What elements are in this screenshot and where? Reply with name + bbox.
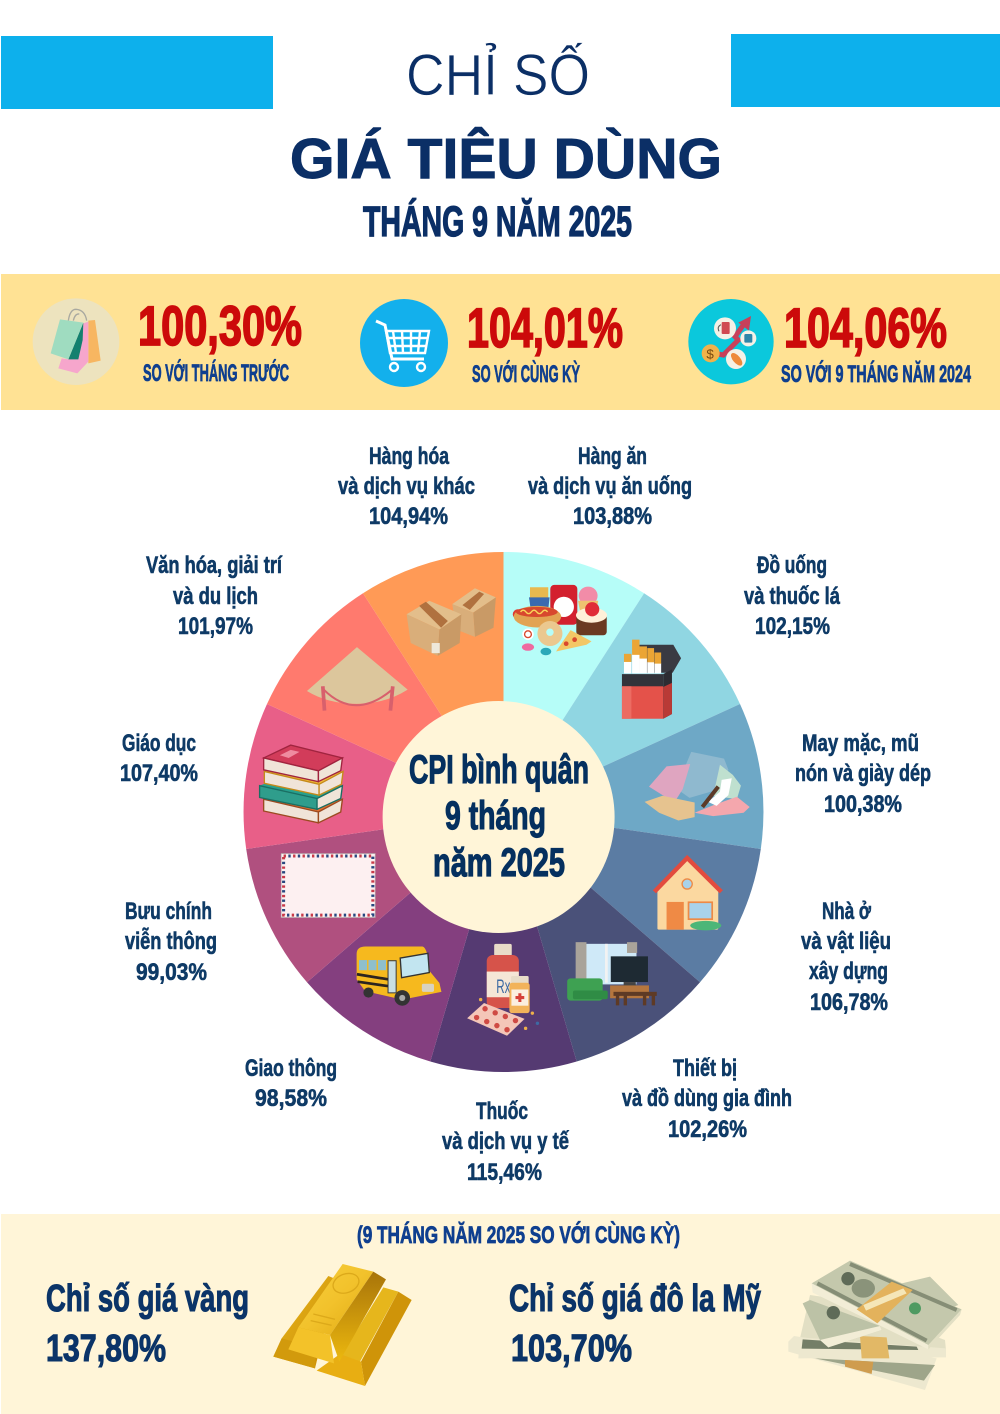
label: medicine and health: và dịch vụ y tế [442,1128,569,1155]
caption: month on month: SO VỚI THÁNG TRƯỚC [143,359,289,387]
label: garments: 100,38% [824,791,902,818]
icon: medicine [467,944,539,1036]
label: medicine and health [442,1098,569,1186]
header accent bar left [1,36,273,109]
icon: books [260,745,343,823]
value: month on month: 100,30% [138,294,302,357]
centre circle: năm 2025 [433,841,565,885]
icon: price basket [688,299,774,384]
label: post and telecom: Bưu chính [125,898,212,925]
label: education: 107,40% [120,760,198,787]
text: gold price index: Chỉ số giá vàng [46,1278,249,1320]
label: education: Giáo dục [122,730,196,757]
icon: shopping bags [33,298,119,385]
text: dollar price index: Chỉ số giá đô la Mỹ [509,1278,761,1320]
label: housing: xây dựng [809,958,888,985]
label: medicine and health: Thuốc [476,1098,528,1125]
label: post and telecom: 99,03% [136,959,207,986]
label: beverages and tobacco: và thuốc lá [744,583,840,610]
text: dollar price index: 103,70% [511,1328,632,1370]
label: garments [795,730,931,818]
label: post and telecom [125,898,217,986]
value: nine months: 104,06% [784,296,947,359]
icon: food [513,585,607,655]
value: year on year: 104,01% [467,296,623,359]
label: culture and tourism: và du lịch [173,583,258,610]
caption: year on year: SO VỚI CÙNG KỲ [472,360,580,388]
label: household appliances [622,1055,792,1143]
panel: gold and dollar [1,1214,1000,1414]
chart: CPI wheel [244,552,763,1072]
header accent bar right [731,34,1000,107]
label: post and telecom: viễn thông [125,927,217,955]
label: household appliances: Thiết bị [673,1055,737,1082]
title: GIÁ TIÊU DÙNG [290,126,722,191]
label: other goods: và dịch vụ khác [338,473,475,500]
title: CHỈ SỐ [406,43,590,108]
icon: cigarettes [622,640,681,719]
centre circle: 9 tháng [445,794,546,838]
label: beverages and tobacco [744,552,840,640]
icon: school bus [357,947,441,1006]
centre circle [383,701,615,933]
wheel icons [260,585,750,1036]
icon: gold bars [273,1264,412,1386]
label: housing [801,898,891,1016]
label: housing: 106,78% [810,989,888,1016]
text: dollar price index [509,1278,761,1370]
label: household appliances: 102,26% [668,1116,747,1143]
label: other goods [338,443,475,530]
label: culture and tourism: 101,97% [178,613,253,640]
label: food and catering: 103,88% [573,503,652,530]
icon: conical hat [307,647,408,711]
panel: headline indices [1,274,1000,410]
icon: boxes [407,588,496,656]
icon: house [654,858,721,930]
text: gold price index: 137,80% [46,1328,166,1370]
label: medicine and health: 115,46% [467,1159,542,1186]
icon: shopping cart [360,299,448,387]
label: beverages and tobacco: 102,15% [755,613,830,640]
label: garments: nón và giày dép [795,760,931,787]
panel heading: (9 THÁNG NĂM 2025 SO VỚI CÙNG KỲ) [357,1221,680,1249]
label: housing: Nhà ở [822,898,872,925]
label: education [120,730,198,787]
label: transport: 98,58% [255,1085,327,1112]
icon: envelope [281,854,375,917]
label: other goods: 104,94% [369,503,448,530]
label: food and catering: Hàng ăn [578,443,647,470]
label: household appliances: và đồ dùng gia đình [622,1085,792,1112]
title [290,43,722,246]
icon: dollar stacks [788,1261,962,1390]
label: transport [245,1055,337,1112]
title: THÁNG 9 NĂM 2025 [363,198,632,246]
label: beverages and tobacco: Đồ uống [757,552,827,579]
label: transport: Giao thông [245,1055,337,1082]
label: garments: May mặc, mũ [802,730,919,757]
label: housing: và vật liệu [801,928,891,955]
label: food and catering: và dịch vụ ăn uống [528,473,692,500]
label: other goods: Hàng hóa [369,443,449,470]
centre circle: CPI bình quân [409,748,589,792]
text: gold price index [46,1278,249,1370]
icon: price basket: $ [706,346,714,361]
icon: living room [567,942,657,1005]
label: food and catering [528,443,692,530]
icon: clothes [645,752,750,820]
label: culture and tourism: Văn hóa, giải trí [146,552,283,579]
icon: medicine: Rx [496,976,511,998]
label: culture and tourism [146,552,283,640]
